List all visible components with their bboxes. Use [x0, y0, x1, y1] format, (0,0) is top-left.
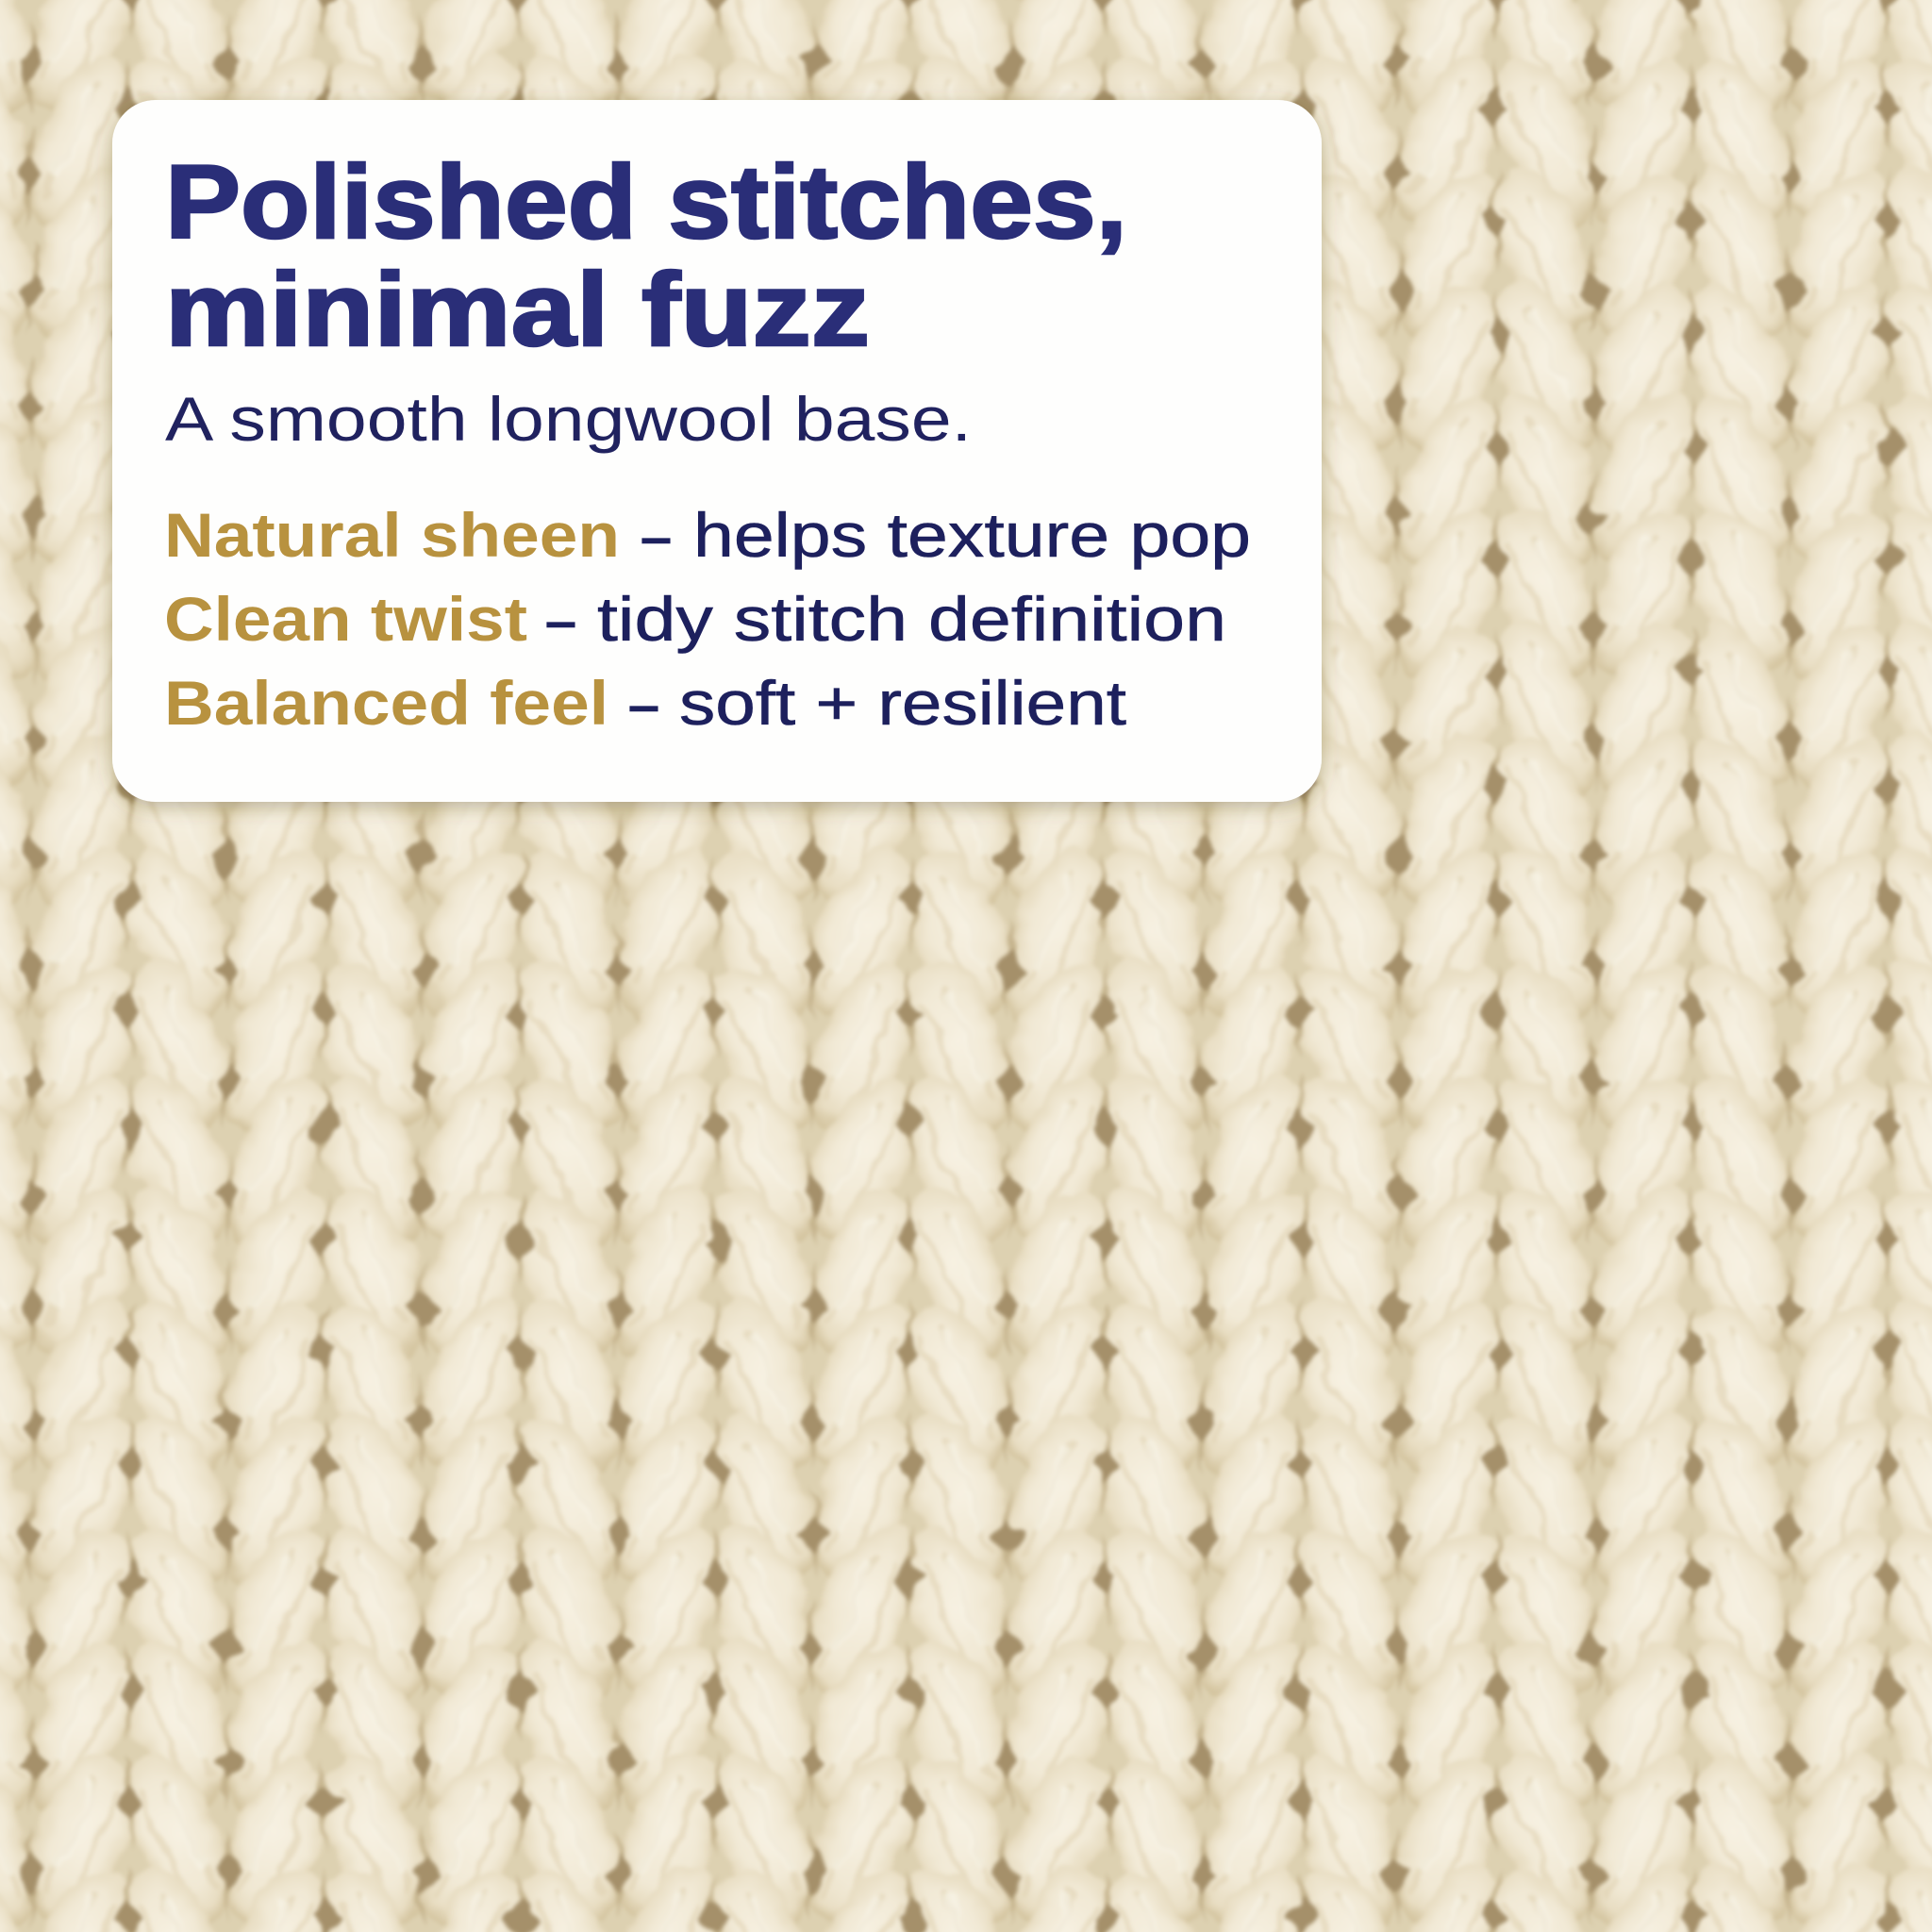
bullet: balanced feel	[164, 668, 1126, 738]
heading: minimal fuzz	[165, 252, 870, 368]
bullet: natural sheen: Natural sheen	[164, 500, 620, 570]
bullet: clean twist: –	[547, 584, 575, 654]
bullet: clean twist: Clean twist	[164, 584, 527, 654]
bullet: balanced feel: Balanced feel	[164, 668, 608, 738]
bullet: natural sheen	[164, 500, 1251, 570]
subtitle: A smooth longwool base.	[165, 384, 972, 454]
heading	[165, 144, 1127, 368]
bullet: clean twist	[164, 584, 1226, 654]
heading: Polished stitches,	[165, 144, 1127, 260]
bullet: natural sheen: –	[642, 500, 670, 570]
bullet: balanced feel: –	[630, 668, 658, 738]
bullet: natural sheen: helps texture pop	[693, 500, 1251, 570]
card background	[112, 100, 1322, 802]
bullet: clean twist: tidy stitch definition	[597, 584, 1226, 654]
panel: info card	[112, 100, 1322, 802]
bullet: balanced feel: soft + resilient	[679, 668, 1126, 738]
